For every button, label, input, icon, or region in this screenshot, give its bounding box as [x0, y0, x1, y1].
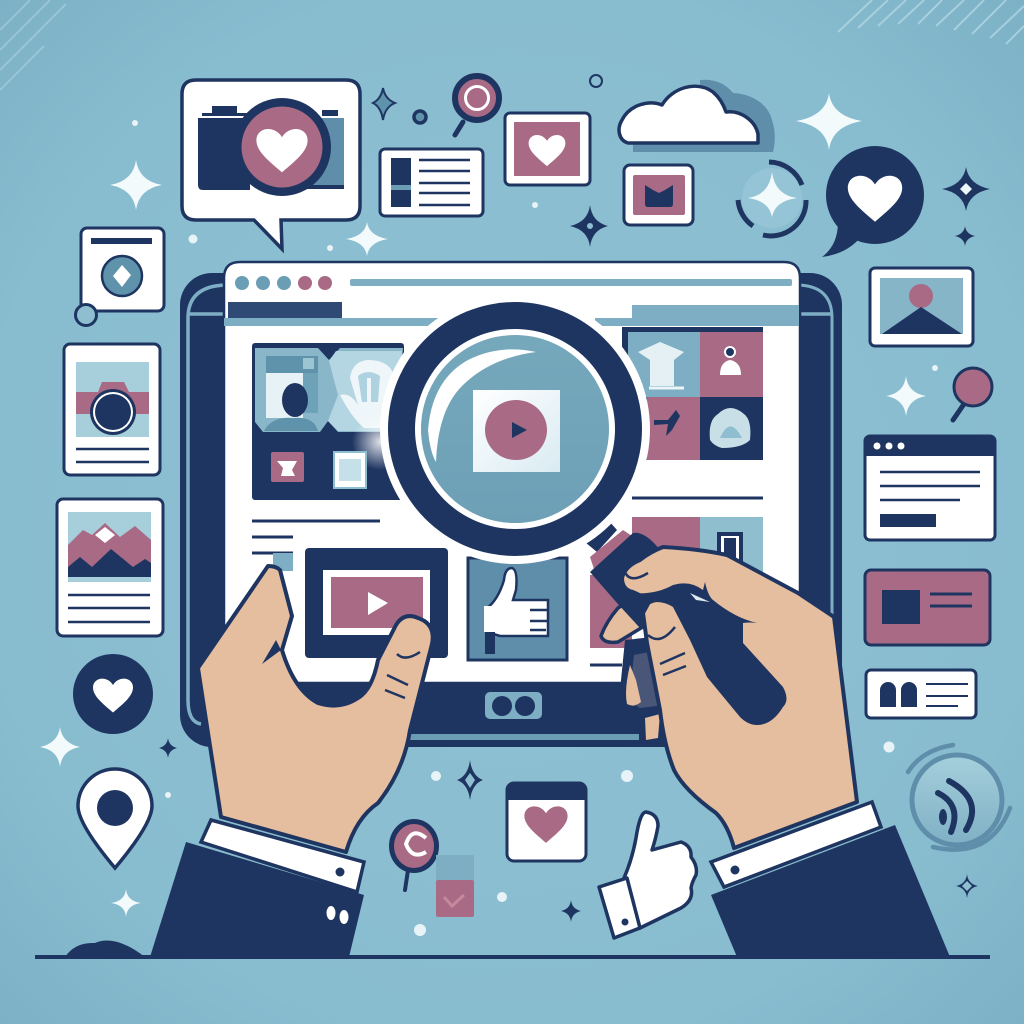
icon: navy sparkle centre [570, 205, 608, 247]
decorative dots [132, 120, 938, 936]
icon: white sparkle top right [796, 93, 862, 150]
icon: location pin [78, 769, 152, 868]
finger creases [625, 572, 686, 675]
pen highlight [690, 593, 710, 602]
icon: heart calendar card [507, 783, 586, 861]
thumbs up tile [468, 558, 567, 660]
left content panel [252, 343, 408, 500]
icon: sparkle right [886, 376, 926, 416]
icon: bottom magnifier [389, 819, 439, 890]
lower right tiles [590, 517, 763, 648]
browser header bars [224, 302, 799, 326]
icon: sparkle bottom left [111, 889, 141, 917]
tablet screen [224, 262, 800, 683]
icon: small ring left [414, 111, 426, 123]
card: camera lens card [64, 344, 160, 475]
left hand [198, 566, 433, 852]
text lines [252, 498, 763, 665]
card: small bookmark card [624, 165, 693, 225]
icon: dashed ring with sparkle [738, 162, 806, 236]
tablet device [180, 262, 842, 747]
ground line and mound [35, 940, 990, 957]
browser address row [235, 276, 792, 290]
icon: small outlined sparkle [373, 88, 395, 120]
card: heart card [505, 113, 590, 185]
top right stripes [838, 0, 1024, 44]
icon: white sparkle left [110, 160, 162, 210]
icon: navy sparkle lower left [159, 738, 177, 758]
right content grid [622, 327, 763, 460]
magnifying glass [380, 294, 650, 574]
card: mauve profile card [865, 570, 990, 645]
icon: small ring [590, 75, 602, 87]
icon: small magnifier right [953, 368, 992, 420]
icon: navy heart circle [73, 654, 153, 734]
lens highlight [428, 349, 536, 462]
right hand [622, 547, 857, 848]
pen grip handle [590, 530, 672, 628]
pen handle over palm [633, 582, 786, 725]
icon: signal circle [908, 745, 1010, 850]
card: text card top [380, 149, 483, 216]
play card in lens [473, 390, 560, 472]
icon: small magnifier top [455, 76, 499, 135]
card: mountain photo card [57, 499, 163, 636]
icon: navy sparkle near thumb [561, 900, 581, 922]
card: left small badge card [76, 228, 164, 326]
icon: navy sparkle bottom [457, 760, 483, 800]
icon: bottom check document [436, 855, 474, 917]
top left stripes [0, 0, 66, 90]
icon: white sparkle centre [346, 222, 388, 256]
icon: sparkle lower right [956, 874, 978, 898]
icon: navy speech bubble with heart [822, 146, 924, 257]
video card [294, 548, 448, 670]
icon: clouds [619, 80, 775, 152]
icon: navy sparkles right [942, 167, 990, 246]
thumb creases [385, 652, 420, 698]
icon: bottom thumbs up [599, 812, 696, 938]
left sleeve [150, 820, 364, 957]
card: browser window card [865, 436, 995, 540]
card: mountain sun card [870, 268, 973, 346]
card: arches card [866, 670, 976, 718]
right sleeve [711, 802, 950, 957]
device button [485, 692, 542, 719]
icon: sparkle lower left [40, 727, 80, 767]
fingers behind pen [601, 600, 672, 746]
icon: speech bubble with camera and heart [182, 80, 360, 249]
